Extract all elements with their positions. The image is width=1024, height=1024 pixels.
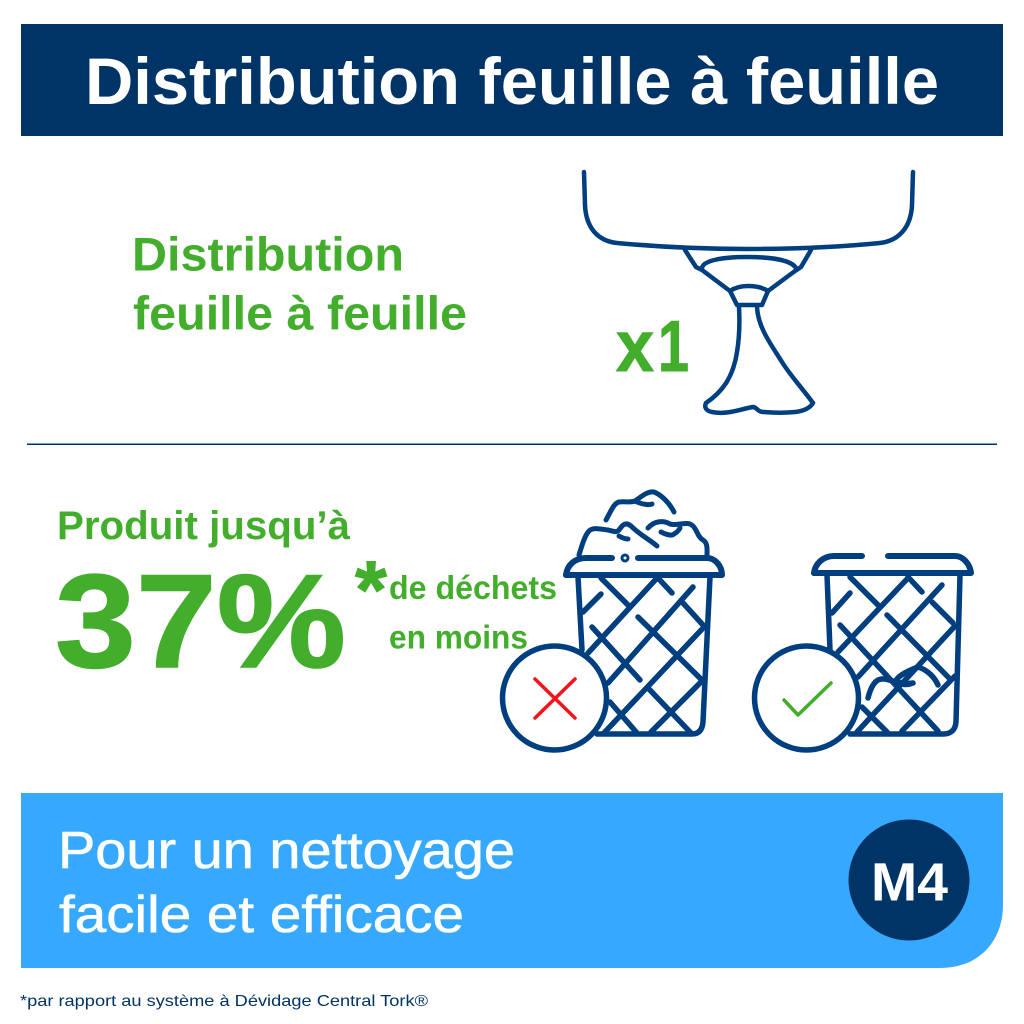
divider line bbox=[27, 444, 997, 445]
slogan: Pour un nettoyage bbox=[58, 821, 515, 879]
text: less waste: en moins bbox=[389, 618, 528, 656]
label: x1: x bbox=[616, 307, 654, 387]
heading: sheet by sheet: Distribution bbox=[132, 228, 404, 280]
badge: M4 bbox=[848, 820, 970, 940]
slogan: facile et efficace bbox=[59, 885, 464, 943]
stat: 37%: 37% bbox=[55, 548, 346, 696]
bin rim bbox=[814, 556, 971, 573]
asterisk: * bbox=[355, 545, 387, 636]
cross badge bbox=[502, 646, 606, 750]
bin body bbox=[827, 575, 960, 734]
icon: clean bin with check bbox=[754, 556, 971, 750]
lattice bbox=[832, 577, 955, 732]
overflowing paper bbox=[579, 492, 707, 555]
label: x1: 1 bbox=[658, 307, 689, 387]
paper sheet in bin bbox=[868, 667, 938, 698]
bin rim bbox=[566, 556, 722, 575]
icon: full bin with cross bbox=[502, 492, 722, 750]
icon: dispenser with one sheet bbox=[584, 172, 913, 413]
text: less waste: de déchets bbox=[389, 569, 557, 606]
label: x1 bbox=[616, 307, 689, 387]
bottom banner bbox=[21, 793, 1003, 968]
panel: waste reduction bbox=[55, 492, 971, 750]
title banner: Distribution feuille à feuille bbox=[85, 44, 939, 118]
panel: sheet by sheet dispensing bbox=[132, 172, 913, 413]
text: up to: Produit jusqu’à bbox=[57, 504, 351, 548]
badge: M4: M4 bbox=[871, 852, 948, 912]
heading: sheet by sheet bbox=[132, 228, 467, 340]
slogan bbox=[58, 821, 515, 943]
title banner bbox=[21, 24, 1003, 136]
footnote: *par rapport au système à Dévidage Central Tork® bbox=[20, 993, 428, 1010]
heading: sheet by sheet: feuille à feuille bbox=[133, 286, 467, 340]
bin body bbox=[578, 577, 710, 734]
check badge bbox=[754, 646, 858, 750]
lattice bbox=[583, 578, 705, 734]
text: less waste bbox=[389, 569, 557, 656]
